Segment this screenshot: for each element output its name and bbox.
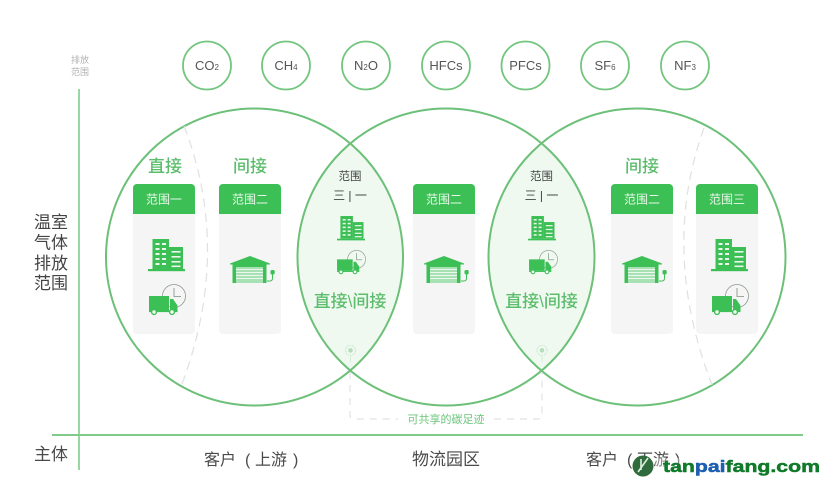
card: scope 2 left [219, 184, 281, 334]
card: scope 2 right [611, 184, 673, 334]
lens content: left overlap: 直接\间接 [314, 292, 386, 311]
subject labels: 下游 [637, 451, 669, 469]
shared footprint bracket [350, 372, 542, 426]
venn circles [106, 108, 786, 406]
card: scope 2 middle [413, 184, 475, 334]
card: scope 2 middle: 范围二 [426, 192, 462, 206]
card: scope 1 left: 范围一 [146, 192, 182, 206]
axis title: greenhouse gas scope [34, 213, 68, 293]
axis title: greenhouse gas scope: 温室 [34, 213, 68, 232]
shared footprint bracket: 可共享的碳足迹 [408, 412, 484, 426]
card: scope 3 right: 范围三 [709, 192, 745, 206]
gas circles row: PFCs [509, 58, 542, 73]
scope axis label: 范围 [71, 66, 89, 77]
card: scope 2 left: 范围二 [232, 192, 268, 206]
card: scope 2 right: 范围二 [624, 192, 660, 206]
gas circles row: SF6 [594, 58, 616, 73]
category headings [148, 157, 659, 176]
subject labels: 上游 [255, 451, 287, 469]
axis title: greenhouse gas scope: 气体 [34, 234, 68, 252]
dashed dividers [182, 126, 712, 385]
lens content: left overlap: 三 | 一 [333, 188, 367, 202]
lens content: right overlap: 三 | 一 [525, 188, 558, 202]
category headings: 直接 [148, 157, 182, 176]
subject labels: 物流园区 [412, 450, 480, 469]
subject labels: ) [675, 452, 680, 469]
axes [52, 89, 803, 470]
category headings: 间接 [233, 157, 267, 176]
lens content: right overlap: 范围 [530, 169, 553, 183]
scope axis label [71, 54, 89, 77]
axis title: greenhouse gas scope: 范围 [34, 274, 68, 293]
subject labels: ( [627, 452, 633, 469]
gas circles row: HFCs [429, 58, 463, 73]
watermark [632, 456, 821, 476]
gas circles row: CO2 [195, 58, 220, 73]
watermark: tan pai fang.com [663, 457, 820, 476]
subject labels: 客户 [586, 451, 618, 469]
lens content: right overlap: 直接\间接 [505, 292, 578, 311]
gas circles row: NF3 [674, 58, 696, 73]
gas circles row: CH4 [274, 58, 298, 73]
lens content: left overlap [314, 169, 386, 362]
subject labels: 主体 [34, 445, 68, 464]
subject labels: ) [293, 452, 298, 469]
category headings: 间接 [625, 157, 659, 176]
subject labels: ( [245, 452, 251, 469]
axis title: greenhouse gas scope: 排放 [34, 254, 68, 273]
subject labels: 客户 [204, 451, 236, 469]
scope axis label: 排放 [71, 54, 89, 65]
card: scope 1 left [133, 184, 195, 334]
card: scope 3 right [696, 184, 758, 334]
overlap lens fills [298, 144, 594, 370]
lens content: left overlap: 范围 [338, 169, 362, 183]
gas circles row: N2O [354, 58, 378, 73]
subject labels [34, 445, 680, 469]
lens content: right overlap [505, 169, 578, 362]
gas circles row [183, 42, 709, 90]
